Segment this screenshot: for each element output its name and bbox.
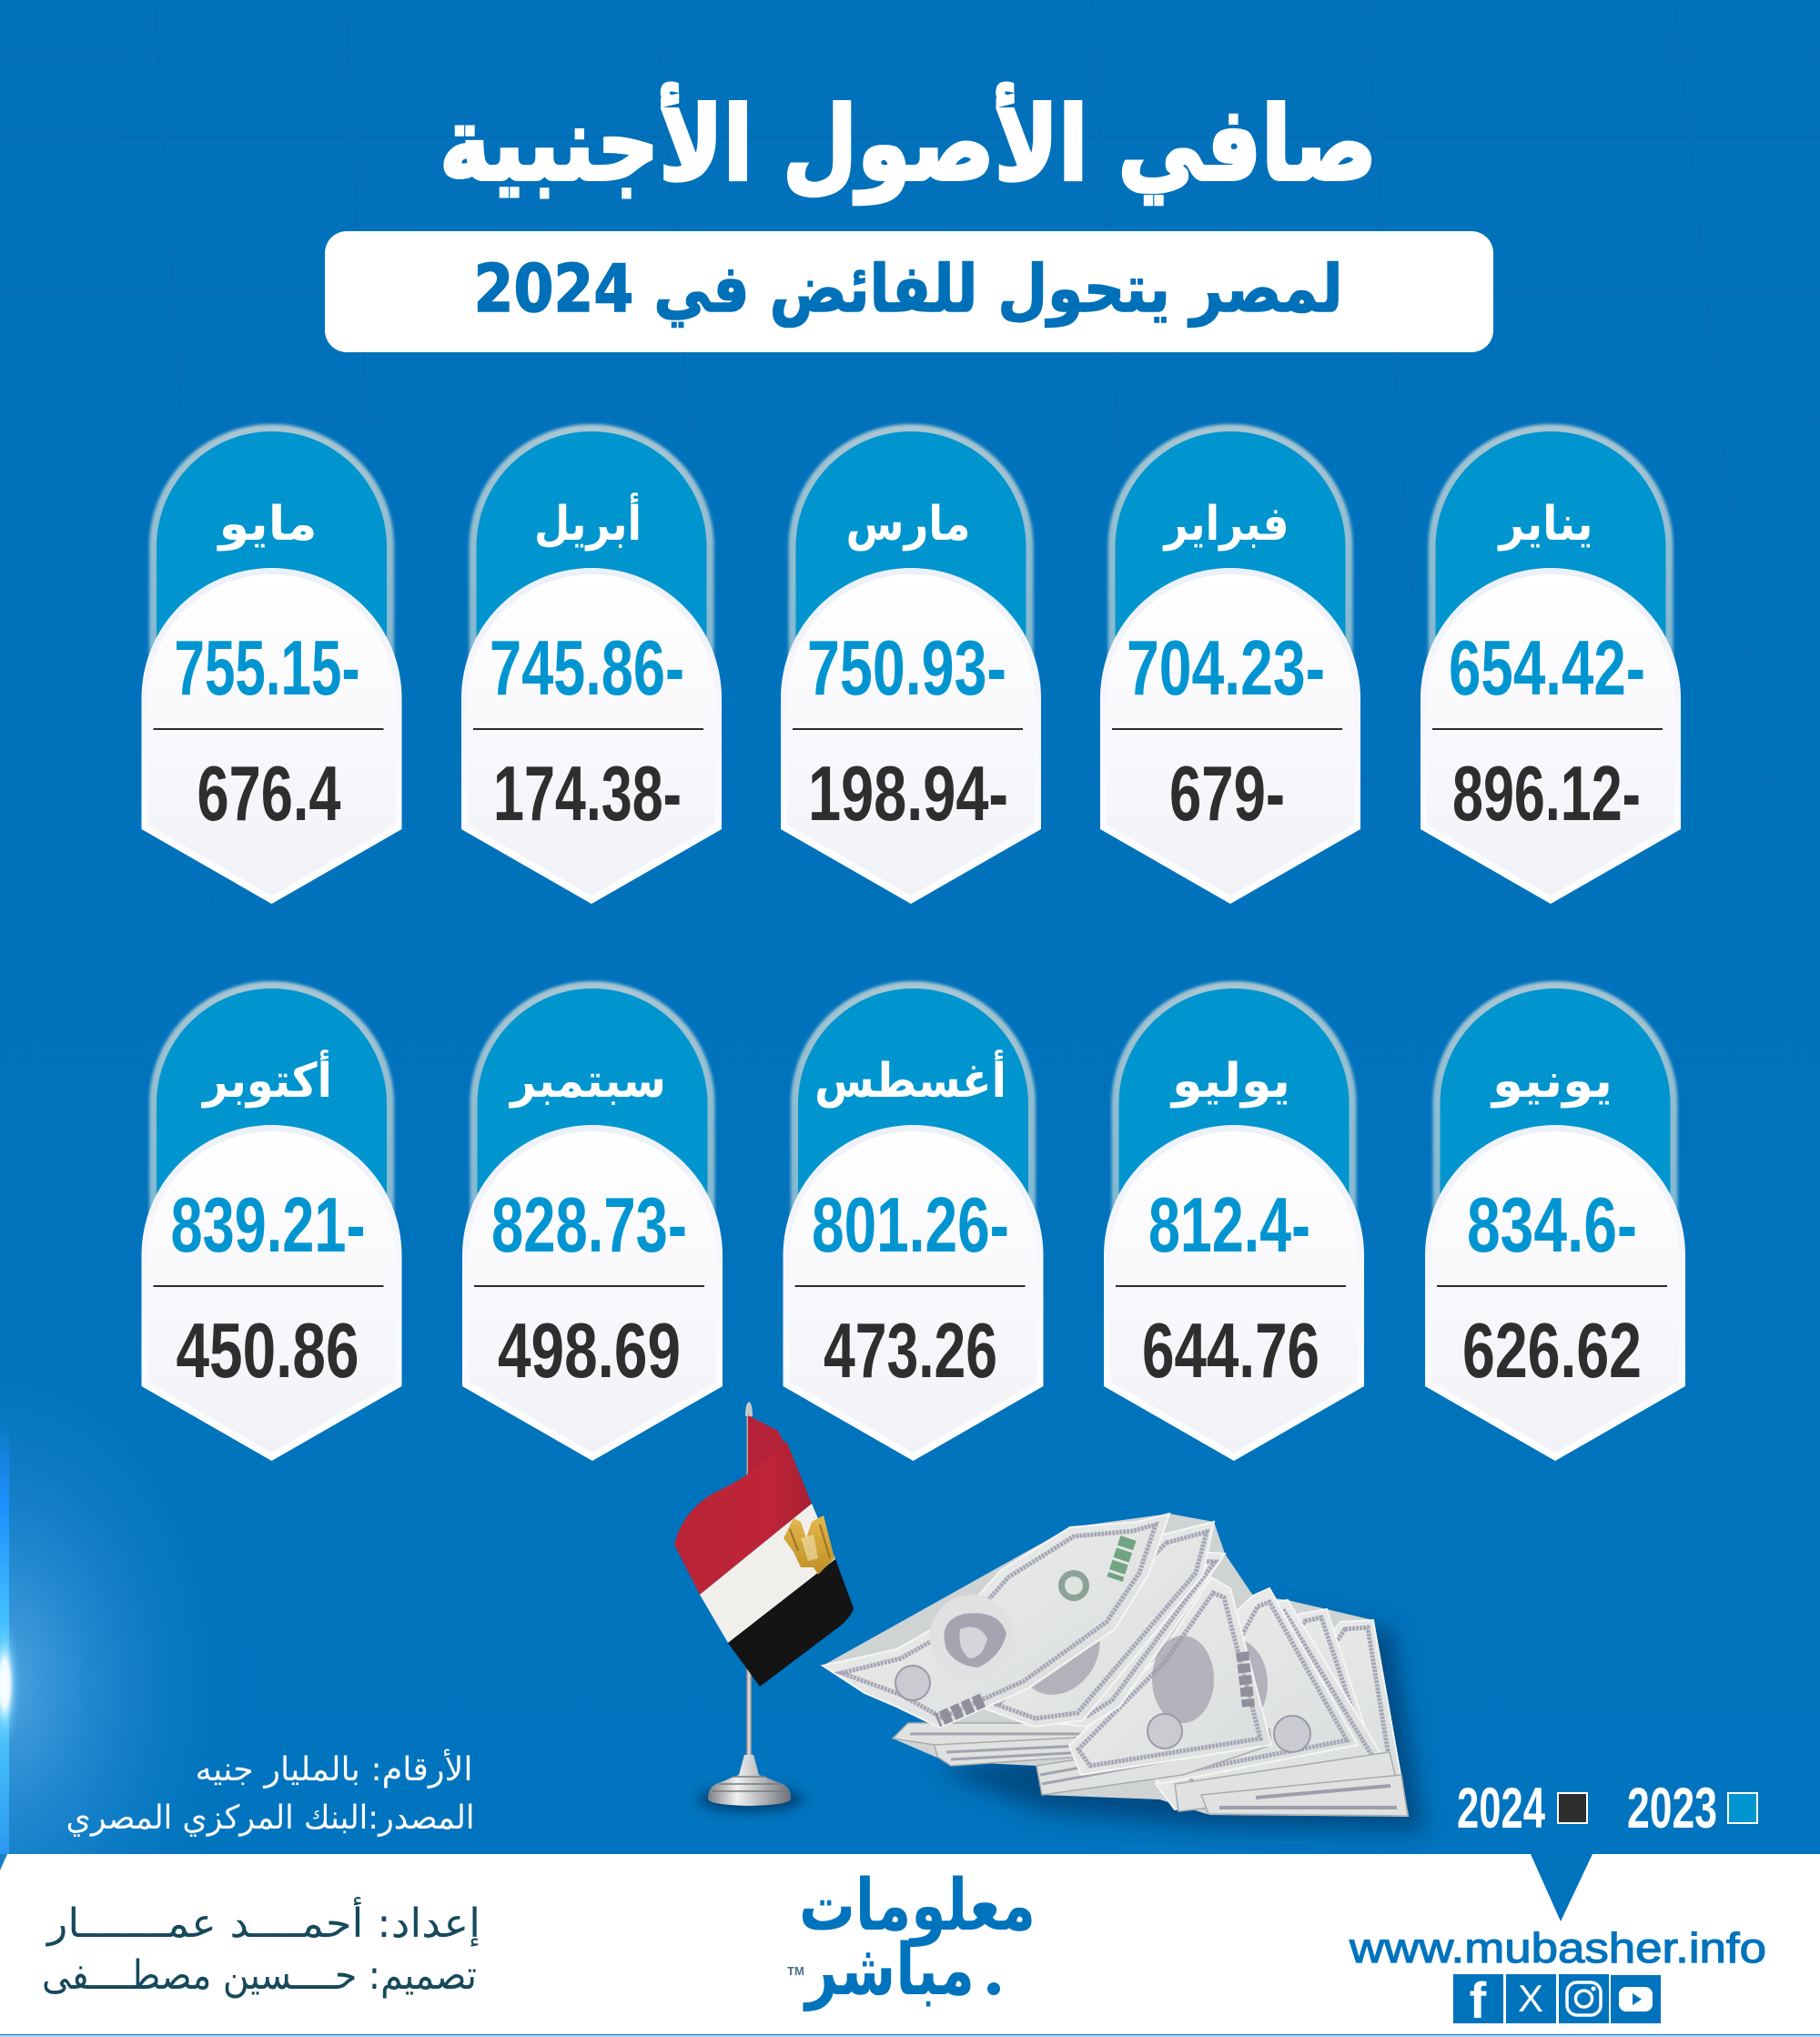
- card: June: [1425, 981, 1685, 1461]
- logo: TM: [787, 1964, 804, 1978]
- card: January: [1421, 424, 1681, 904]
- illustration: Egyptian table flag: [674, 1402, 854, 1812]
- icon: facebook: [1453, 1971, 1503, 2029]
- card: July: [1104, 981, 1364, 1461]
- card: April: [461, 424, 722, 904]
- card: September: [462, 981, 723, 1461]
- card: June: 626.62: [1462, 1308, 1642, 1394]
- card: July: 644.76: [1142, 1308, 1320, 1394]
- card: September: سبتمبر: [508, 1054, 666, 1109]
- logo: [787, 1865, 1036, 2012]
- card: May: 755.15-: [175, 625, 360, 712]
- icon: youtube: [1611, 1975, 1661, 2023]
- far right notes: [1207, 1620, 1408, 1816]
- central notes: [1036, 1729, 1271, 1795]
- card: April: 174.38-: [493, 751, 682, 837]
- logo: معلومات: [799, 1865, 1036, 1947]
- card: January: 896.12-: [1452, 751, 1641, 837]
- credits: إعداد: أحمــــد عمـــــــار: [46, 1897, 480, 1947]
- card: March: [781, 424, 1041, 904]
- card: August: أغسطس: [814, 1049, 1006, 1109]
- card: October: 839.21-: [171, 1182, 366, 1269]
- legend: 2024: 2024: [1457, 1777, 1545, 1840]
- card: February: [1100, 424, 1360, 904]
- front note: [823, 1514, 1169, 1728]
- card: July: 812.4-: [1148, 1182, 1310, 1269]
- card: August: 473.26: [824, 1308, 997, 1394]
- card: May: مايو: [216, 497, 318, 552]
- notes: units and source: الأرقام: بالمليار جنيه: [195, 1748, 473, 1789]
- card: March: مارس: [846, 497, 970, 552]
- icon: facebook: f: [1470, 1971, 1487, 2029]
- card: September: 498.69: [498, 1308, 681, 1394]
- card: February: 679-: [1169, 751, 1285, 837]
- icon: X: X: [1518, 1977, 1543, 2020]
- card: January: يناير: [1497, 497, 1593, 552]
- card: October: أكتوبر: [200, 1049, 332, 1109]
- card: October: 450.86: [177, 1308, 359, 1394]
- icon: X: [1506, 1974, 1556, 2023]
- card: May: 676.4: [197, 751, 340, 837]
- credits: [42, 1897, 480, 1999]
- card: February: فبراير: [1162, 497, 1289, 552]
- footer pointer: [1531, 1854, 1592, 1921]
- footer: [0, 1854, 1820, 2037]
- card: June: يونيو: [1490, 1054, 1613, 1109]
- icon: instagram: [1559, 1974, 1609, 2023]
- lower left bundle: [893, 1723, 1159, 1761]
- website: www.mubasher.info: [1349, 1924, 1766, 1971]
- card: April: 745.86-: [490, 625, 684, 712]
- logo: مباشر: [803, 1930, 975, 2012]
- card: October: [142, 981, 402, 1461]
- title: صافي الأصول الأجنبية: [440, 83, 1377, 205]
- card: February: 704.23-: [1127, 625, 1325, 712]
- subtitle text: لمصر يتحول للفائض في 2024: [474, 250, 1343, 328]
- notes: units and source: المصدر:البنك المركزي المصري: [66, 1799, 475, 1837]
- card: September: 828.73-: [491, 1182, 687, 1269]
- card: January: 654.42-: [1449, 625, 1645, 712]
- card: July: يوليو: [1169, 1054, 1290, 1109]
- credits: تصميم: حــــسين مصطــــفى: [42, 1952, 477, 1999]
- card: August: [783, 981, 1043, 1461]
- notes: units and source: [66, 1748, 475, 1837]
- card: April: أبريل: [534, 492, 642, 552]
- card: March: 198.94-: [808, 751, 1008, 837]
- legend: 2023: 2023: [1627, 1777, 1717, 1840]
- bundle layers right: [1175, 1752, 1395, 1811]
- card: June: 834.6-: [1467, 1182, 1637, 1269]
- card: August: 801.26-: [812, 1182, 1009, 1269]
- card: March: 750.93-: [807, 625, 1006, 712]
- card: May: [142, 424, 402, 904]
- subtitle box: [325, 231, 1493, 352]
- illustration: stack of dollar banknotes: [823, 1514, 1424, 1831]
- legend: [1457, 1777, 1757, 1840]
